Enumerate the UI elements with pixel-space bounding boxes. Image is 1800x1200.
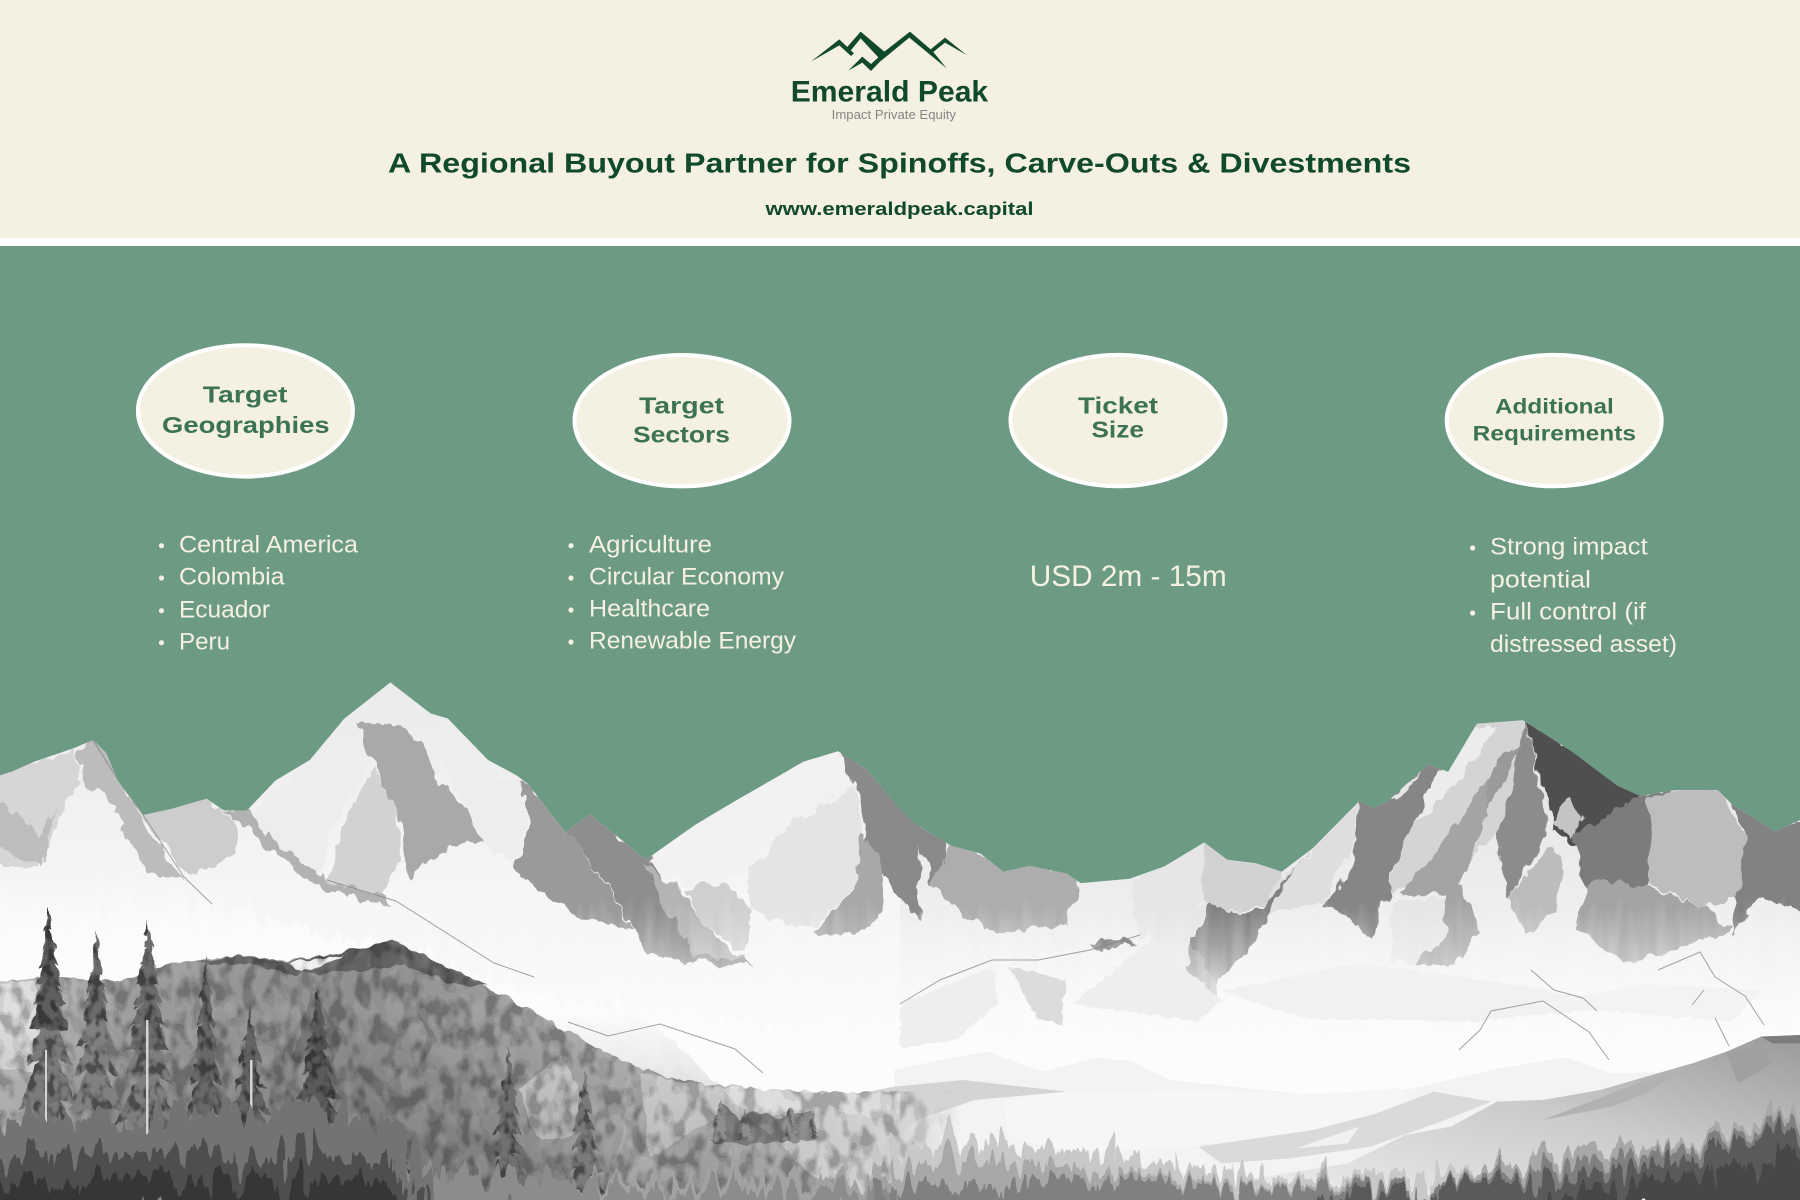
badge: Target Geographies: Target	[203, 382, 288, 408]
hill shading toward foreground	[0, 1010, 880, 1200]
list: requirements: distressed asset)	[1490, 631, 1677, 658]
tall spruce trees	[13, 904, 820, 1200]
list: requirements: Strong impact	[1490, 533, 1648, 560]
badge: Additional Requirements	[1447, 355, 1662, 486]
valley floor base	[0, 1090, 1800, 1200]
list: geographies: Central America	[179, 531, 359, 558]
badge: Target Sectors: Sectors	[633, 421, 730, 447]
forest bands	[0, 1110, 1800, 1200]
white divider band	[0, 238, 1800, 246]
left hill	[0, 941, 960, 1200]
header panel	[0, 0, 1800, 238]
ridge lines	[0, 709, 1764, 1073]
list: sectors: Healthcare	[589, 596, 710, 623]
list: sectors: Renewable Energy	[589, 627, 796, 654]
badge: Ticket Size: Ticket	[1078, 392, 1158, 418]
tree trunks	[45, 1020, 252, 1190]
far valley hills right	[843, 1035, 1800, 1200]
text: ticket range: USD 2m - 15m	[1030, 560, 1227, 593]
illustration: snowy mountain range and forest	[0, 660, 1800, 1200]
badge: Additional Requirements: Requirements	[1473, 423, 1636, 446]
right forest band	[883, 1110, 1800, 1200]
mountain massifs clipped to skyline	[0, 682, 1800, 1094]
list: sectors	[568, 531, 796, 654]
list: geographies: Peru	[179, 628, 230, 655]
logo tagline: Impact Private Equity	[832, 107, 957, 122]
list: requirements	[1470, 533, 1677, 658]
list: requirements: potential	[1490, 566, 1591, 593]
title: A Regional Buyout Partner for Spinoffs, Carve-Outs & Divestments	[388, 148, 1411, 179]
badge: Target Sectors	[574, 355, 790, 486]
list: geographies: Ecuador	[179, 596, 270, 623]
list: geographies	[159, 531, 359, 655]
website url: www.emeraldpeak.capital	[764, 198, 1034, 219]
right mountain facets	[889, 719, 1800, 1001]
badge: Ticket Size	[1010, 355, 1226, 486]
logo wordmark: Emerald Peak	[791, 76, 989, 109]
badge: Target Geographies	[138, 345, 353, 477]
badge: Target Geographies: Geographies	[162, 412, 330, 438]
badge: Ticket Size: Size	[1091, 416, 1144, 442]
snowfield shading	[898, 956, 1721, 1049]
column: target geographies	[138, 345, 359, 655]
column: additional requirements	[1447, 355, 1677, 658]
left mountain facets	[0, 719, 918, 967]
left forest band	[0, 1110, 900, 1200]
list: sectors: Agriculture	[589, 531, 712, 558]
logo: Emerald Peak	[791, 32, 989, 122]
list: geographies: Colombia	[179, 563, 285, 590]
column: ticket size	[1010, 355, 1227, 593]
icon: mountain logo mark	[811, 32, 967, 71]
column: target sectors	[568, 355, 796, 654]
list: sectors: Circular Economy	[589, 563, 784, 590]
list: requirements: Full control (if	[1490, 598, 1646, 625]
badge: Additional Requirements: Additional	[1495, 395, 1614, 418]
badge: Target Sectors: Target	[639, 392, 724, 418]
fog layer	[577, 902, 1785, 996]
green background panel	[0, 246, 1800, 1200]
